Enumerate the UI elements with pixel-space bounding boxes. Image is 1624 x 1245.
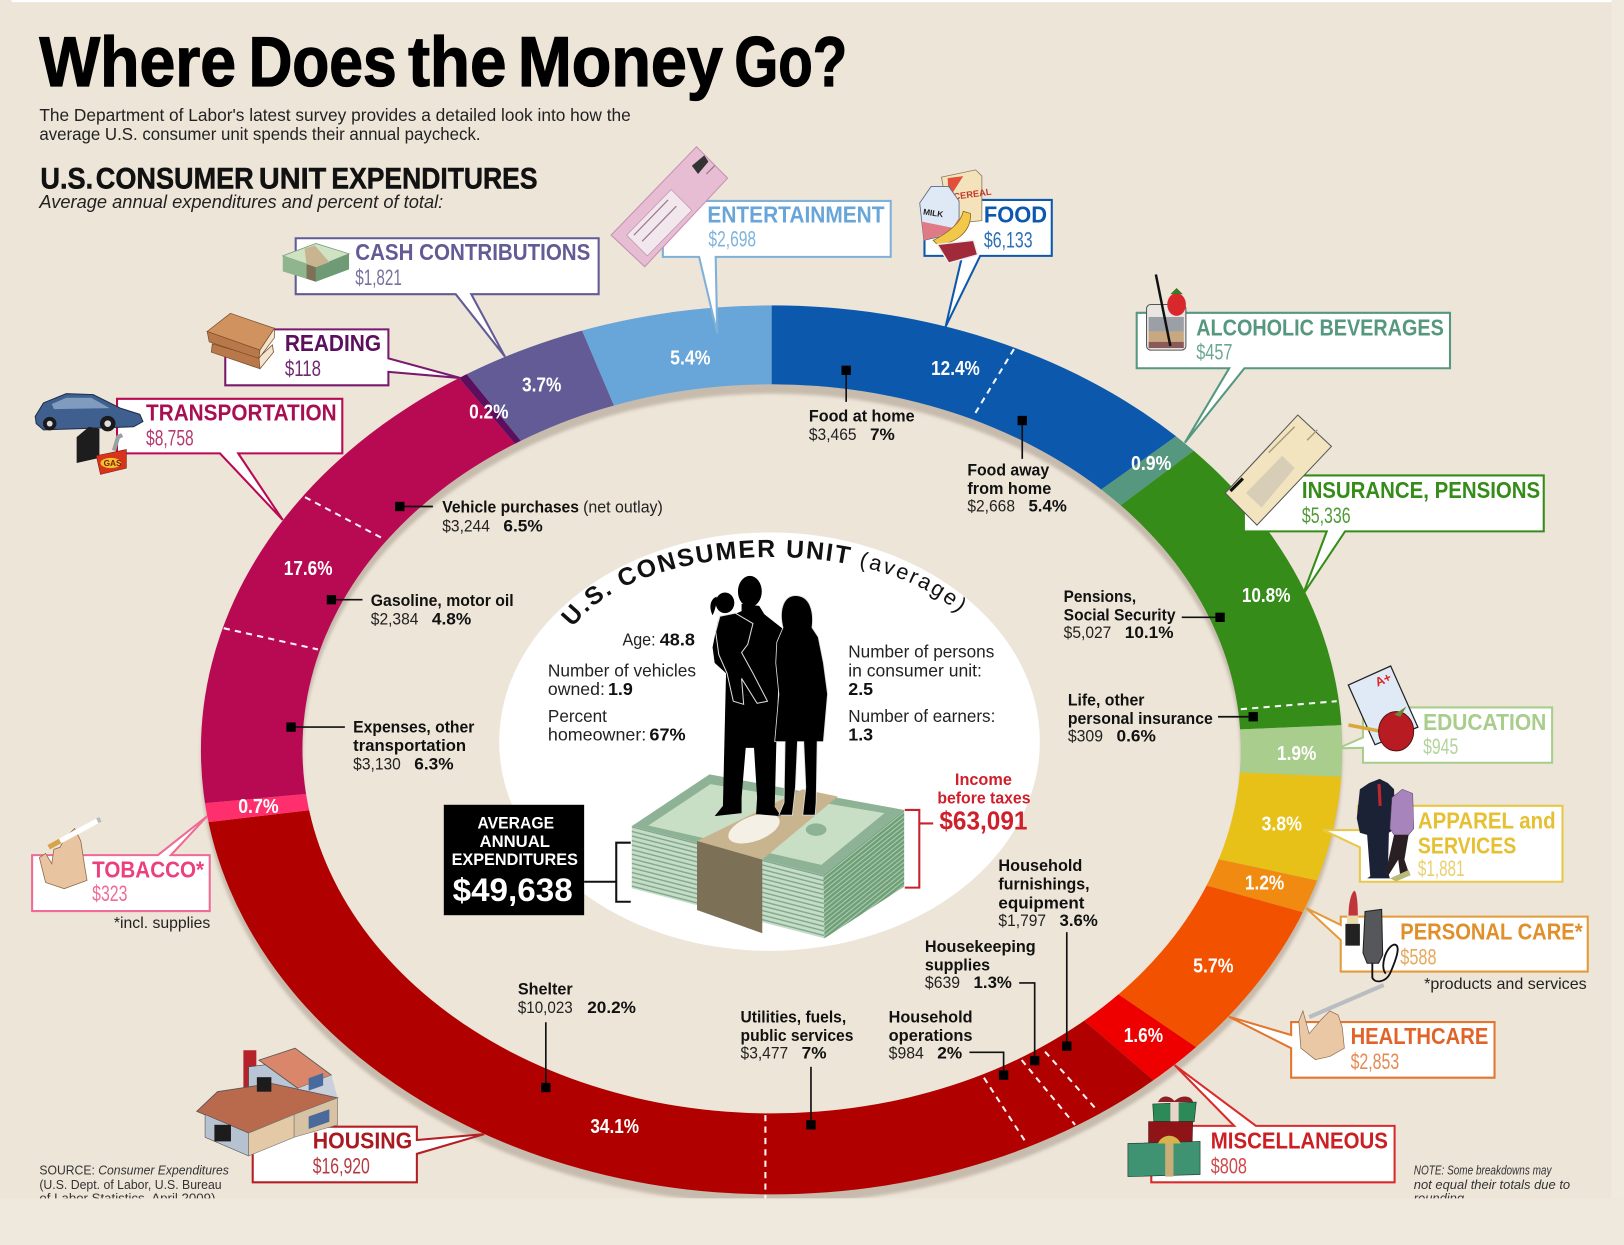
breakdown: pensions: Social Security <box>1064 605 1176 624</box>
breakdown: housekeeping supplies: Housekeeping <box>925 937 1036 956</box>
breakdown: pensions <box>1064 587 1225 642</box>
breakdown: shelter: Shelter <box>518 979 573 998</box>
breakdown: utilities: Utilities, fuels, <box>741 1007 846 1026</box>
breakdown: food at home: 7% <box>870 425 895 444</box>
footnote: incl. supplies: *incl. supplies <box>114 915 210 932</box>
breakdown: food away from home <box>967 416 1067 516</box>
ring percentage labels <box>238 347 1316 1138</box>
breakdown: life insurance <box>1068 690 1258 746</box>
breakdown: life insurance: $309 <box>1068 727 1103 746</box>
segment: entertainment <box>582 305 772 406</box>
icon: suit and dress <box>1357 779 1414 881</box>
callout: food: FOOD <box>984 202 1047 228</box>
callout: reading: $118 <box>285 356 321 381</box>
income before taxes <box>937 770 1031 836</box>
breakdown: food away from home: from home <box>967 479 1051 498</box>
consumer stats right: Number of persons <box>848 643 994 662</box>
woman <box>775 596 828 815</box>
breakdown: other transportation: Expenses, other <box>353 717 475 736</box>
annual expenditures box <box>444 805 584 915</box>
breakdown: food away from home: 5.4% <box>1028 497 1067 516</box>
icon: lipstick and clippers <box>1345 891 1398 981</box>
breakdown: vehicle purchases: 6.5% <box>503 516 543 535</box>
breakdown: utilities: public services <box>741 1026 853 1045</box>
black bracket <box>584 843 631 902</box>
icon: hand with cigarette <box>39 819 100 889</box>
icon: car, oil and gas can: GAS <box>104 459 122 468</box>
title <box>39 22 847 101</box>
callout: personal care: PERSONAL CARE* <box>1400 918 1583 944</box>
callout: housing <box>197 1048 484 1182</box>
breakdown: household operations: operations <box>889 1026 973 1045</box>
segment: personal care <box>1206 859 1317 912</box>
callout: reading <box>207 313 461 385</box>
breakdown: household operations: $984 <box>889 1044 924 1063</box>
callout: transportation: $8,758 <box>146 425 194 450</box>
consumer stats right: in consumer unit: <box>848 661 982 680</box>
annual expenditures box: ANNUAL <box>480 832 550 851</box>
callout: alcoholic beverages: $457 <box>1196 339 1232 364</box>
segment: insurance, pensions <box>1120 450 1342 730</box>
icon: notebook, apple and pencil: A+ <box>1373 670 1394 689</box>
breakdown: household furnishings: 3.6% <box>1060 911 1098 930</box>
segment: miscellaneous <box>1084 994 1196 1080</box>
breakdown: utilities: 7% <box>802 1044 827 1063</box>
breakdown: shelter: 20.2% <box>587 998 636 1017</box>
breakdown: other transportation: 6.3% <box>414 755 454 774</box>
ring shadow <box>201 315 1342 1204</box>
man <box>713 576 784 816</box>
section heading: CONSUMER <box>96 163 254 196</box>
breakdown: gasoline <box>327 591 514 629</box>
callout: apparel and services: APPAREL and <box>1418 808 1556 834</box>
segment: apparel and services <box>1218 772 1342 880</box>
ring percentage labels: 5.4% <box>670 347 711 370</box>
breakdown: household operations: Household <box>889 1007 973 1026</box>
segment: housing <box>208 810 1154 1194</box>
icon: car, oil and gas can <box>35 394 143 474</box>
callout: housing: HOUSING <box>313 1128 412 1154</box>
intro text <box>39 106 631 144</box>
breakdown: vehicle purchases: $3,244 <box>442 516 490 535</box>
breakdown: household furnishings <box>998 856 1098 1051</box>
consumer stats right: 2.5 <box>848 680 874 699</box>
icon: notebook, apple and pencil <box>1348 666 1418 751</box>
income before taxes: before taxes <box>937 789 1031 808</box>
ring percentage labels: 17.6% <box>284 557 332 580</box>
breakdown: gasoline: Gasoline, motor oil <box>371 591 514 610</box>
breakdown: food away from home: Food away <box>967 460 1050 479</box>
consumer stats left: Number of vehicles <box>548 661 696 680</box>
breakdown: household furnishings: furnishings, <box>998 875 1090 894</box>
center white ellipse <box>499 532 1040 951</box>
title: the <box>408 22 506 101</box>
callout: cash contributions: $1,821 <box>355 265 402 290</box>
consumer stats left: homeowner: <box>548 726 646 745</box>
breakdown: household operations <box>889 1007 1008 1080</box>
consumer stats left: Percent <box>548 707 607 726</box>
section heading: EXPENDITURES <box>331 163 538 196</box>
ring percentage labels: 1.2% <box>1245 872 1284 895</box>
ring percentage labels: 3.7% <box>522 374 561 397</box>
breakdown: housekeeping supplies: supplies <box>925 956 990 975</box>
breakdown: vehicle purchases: (net outlay) <box>583 498 663 517</box>
segment: food <box>772 305 1176 490</box>
callout: entertainment: $2,698 <box>708 227 756 252</box>
segment: alcoholic beverages <box>1101 436 1194 506</box>
ring percentage labels: 0.9% <box>1131 452 1171 475</box>
breakdown: food at home <box>809 366 915 444</box>
section heading <box>40 163 538 196</box>
callout: entertainment <box>611 147 891 334</box>
segment: cash contributions <box>466 330 614 441</box>
callout: education <box>1338 666 1552 763</box>
callout: tobacco: $323 <box>92 881 127 906</box>
intro text: average U.S. consumer unit spends their annual paycheck. <box>39 125 481 144</box>
icon: tickets <box>611 147 728 267</box>
breakdown: vehicle purchases: Vehicle purchases <box>442 498 579 517</box>
curved heading: U.S. consumer unit (average): U.S. CONSUMER UNIT (average) <box>560 540 965 624</box>
ring percentage labels: 1.6% <box>1124 1024 1163 1047</box>
red bracket <box>905 810 933 888</box>
callout: insurance, pensions: $5,336 <box>1302 503 1351 528</box>
consumer stats right: Number of earners: <box>848 707 995 726</box>
callout: food: $6,133 <box>984 228 1033 253</box>
title: Does <box>249 22 397 101</box>
intro text: The Department of Labor's latest survey provides a detailed look into how the <box>39 106 631 125</box>
callout: miscellaneous <box>1128 1065 1395 1182</box>
callout: cash contributions <box>283 238 599 357</box>
callout: housing: $16,920 <box>313 1154 370 1179</box>
ring percentage labels: 0.7% <box>238 795 279 818</box>
icon: hand with syringe <box>1299 985 1384 1060</box>
rounding note: NOTE: Some breakdowns may <box>1414 1163 1553 1178</box>
breakdown: household furnishings: equipment <box>998 893 1085 912</box>
rounding note: not equal their totals due to <box>1414 1177 1570 1192</box>
breakdown: gasoline: $2,384 <box>371 610 418 629</box>
icon: cash <box>283 243 349 282</box>
consumer stats left <box>548 630 696 745</box>
breakdown: life insurance: 0.6% <box>1116 727 1156 746</box>
icon: groceries <box>920 170 992 263</box>
icon: family silhouette <box>710 576 828 816</box>
breakdown: utilities <box>741 1007 853 1129</box>
child <box>710 592 767 704</box>
callout: insurance, pensions <box>1225 415 1544 595</box>
segment: healthcare <box>1118 886 1303 1047</box>
callout: personal care: $588 <box>1400 944 1437 969</box>
title: Go? <box>734 22 847 101</box>
annual expenditures box: $49,638 <box>453 872 573 908</box>
callout: healthcare: $2,853 <box>1351 1049 1399 1074</box>
callout: apparel and services: SERVICES <box>1418 832 1516 858</box>
section subheading: Average annual expenditures and percent of total: <box>38 191 443 212</box>
breakdown: life insurance: Life, other <box>1068 690 1145 709</box>
breakdown: housekeeping supplies: 1.3% <box>974 973 1012 992</box>
callout: alcoholic beverages: ALCOHOLIC BEVERAGES <box>1196 315 1444 341</box>
icon: stack of money <box>632 774 904 938</box>
breakdown: pensions: Pensions, <box>1064 587 1136 606</box>
annual expenditures box: AVERAGE <box>477 814 554 833</box>
breakdown: household operations: 2% <box>937 1044 962 1063</box>
breakdown: pensions: $5,027 <box>1064 623 1111 642</box>
callout: education: $945 <box>1423 734 1458 759</box>
segment: reading <box>460 374 521 444</box>
breakdown: food at home: Food at home <box>809 407 915 426</box>
segment: education <box>1240 725 1342 776</box>
title: Money <box>518 22 723 101</box>
breakdown: other transportation: $3,130 <box>353 755 401 774</box>
section heading: UNIT <box>259 163 327 196</box>
income before taxes: $63,091 <box>939 808 1027 836</box>
callout: education: EDUCATION <box>1423 709 1546 735</box>
callout: transportation <box>35 394 342 520</box>
consumer stats left: Age: <box>622 630 656 649</box>
segment: transportation <box>200 378 515 804</box>
callout: healthcare: HEALTHCARE <box>1351 1023 1488 1049</box>
consumer stats right: 1.3 <box>848 726 873 745</box>
breakdown: other transportation: transportation <box>353 736 466 755</box>
breakdown: food away from home: $2,668 <box>967 497 1015 516</box>
title: Where <box>39 22 236 101</box>
breakdown: food at home: $3,465 <box>809 425 857 444</box>
segment: tobacco <box>205 794 310 822</box>
callout: miscellaneous: $808 <box>1211 1154 1247 1179</box>
breakdown: utilities: $3,477 <box>741 1044 788 1063</box>
ring percentage labels: 10.8% <box>1242 584 1291 607</box>
source note: (U.S. Dept. of Labor, U.S. Bureau <box>39 1177 222 1192</box>
breakdown: pensions: 10.1% <box>1125 623 1174 642</box>
income before taxes: Income <box>955 770 1012 789</box>
annual expenditures box: EXPENDITURES <box>452 850 578 869</box>
breakdown: household furnishings: Household <box>998 856 1082 875</box>
source note: SOURCE: Consumer Expenditures <box>39 1163 229 1178</box>
breakdown: housekeeping supplies <box>925 937 1039 1065</box>
callout: tobacco <box>32 816 210 911</box>
breakdown: household furnishings: $1,797 <box>998 911 1046 930</box>
ring percentage labels: 3.8% <box>1262 813 1302 836</box>
breakdown: vehicle purchases <box>395 498 663 535</box>
rounding note: rounding. <box>1414 1191 1468 1206</box>
callout: alcoholic beverages <box>1137 274 1450 443</box>
callout: personal care <box>1306 891 1588 981</box>
breakdown: gasoline: 4.8% <box>432 610 472 629</box>
consumer stats left: owned: <box>548 680 605 699</box>
ring percentage labels: 34.1% <box>590 1115 639 1138</box>
callout: insurance, pensions: INSURANCE, PENSIONS <box>1302 477 1540 503</box>
icon: books <box>207 313 274 369</box>
breakdown: housekeeping supplies: $639 <box>925 973 960 992</box>
source note <box>39 1163 229 1206</box>
consumer stats left: 1.9 <box>608 680 633 699</box>
ring percentage labels: 0.2% <box>469 400 509 423</box>
footnote: products and services: *products and services <box>1424 976 1587 993</box>
callout: transportation: TRANSPORTATION <box>146 400 337 426</box>
section heading: U.S. <box>40 163 93 196</box>
consumer stats left: 48.8 <box>660 630 695 649</box>
icon: pay check <box>1225 415 1331 525</box>
rounding note <box>1414 1163 1570 1206</box>
breakdown: shelter <box>518 979 636 1092</box>
ring percentage labels: 1.9% <box>1277 742 1316 765</box>
callout: apparel and services: $1,881 <box>1418 856 1465 881</box>
icon: groceries: MILK <box>923 207 944 219</box>
icon: gift boxes <box>1128 1096 1200 1177</box>
callout: cash contributions: CASH CONTRIBUTIONS <box>355 239 590 265</box>
callout: apparel and services <box>1323 779 1562 882</box>
icon: groceries: CEREAL <box>953 187 992 202</box>
callout: food <box>920 170 1052 327</box>
breakdown: shelter: $10,023 <box>518 998 573 1017</box>
icon: cocktail <box>1147 274 1186 350</box>
callout: miscellaneous: MISCELLANEOUS <box>1211 1128 1388 1154</box>
callout: tobacco: TOBACCO* <box>92 856 204 882</box>
callout: healthcare <box>1229 985 1495 1078</box>
breakdown: life insurance: personal insurance <box>1068 709 1213 728</box>
callout: entertainment: ENTERTAINMENT <box>707 202 885 228</box>
icon: house <box>197 1048 338 1156</box>
source note: of Labor Statistics, April 2009) <box>39 1191 215 1206</box>
consumer stats right <box>848 643 995 745</box>
ring percentage labels: 5.7% <box>1193 955 1234 978</box>
consumer stats left: 67% <box>649 726 686 745</box>
expenditure ring chart <box>200 305 1342 1194</box>
breakdown: other transportation <box>286 717 475 774</box>
callout: reading: READING <box>285 330 381 356</box>
ring percentage labels: 12.4% <box>931 357 980 380</box>
